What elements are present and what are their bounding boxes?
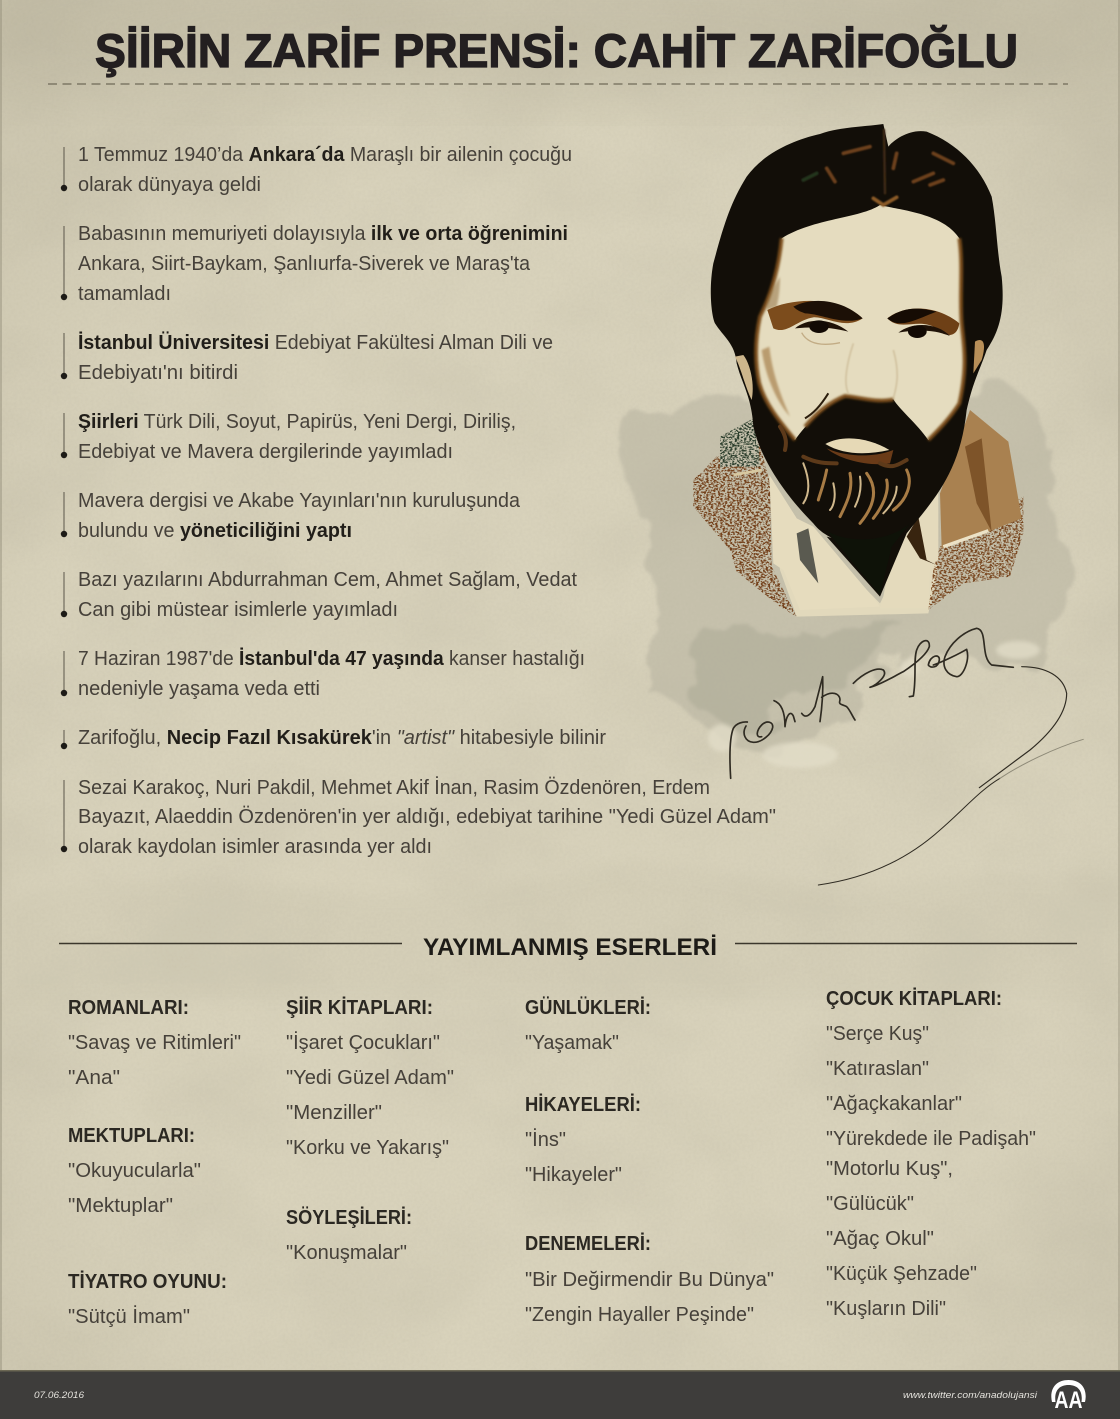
cheek and temple shading — [762, 347, 790, 417]
scratchy jacket texture — [693, 417, 1023, 617]
bio item 3 — [61, 331, 553, 384]
bio item 8: Zarifoğlu, Necip Fazıl Kısakürek'in "artist" hitabesiyle bilinir — [78, 727, 606, 749]
bio item 5: bulundu ve yöneticiliğini yaptı — [78, 520, 352, 542]
column 4: children's books: "Motorlu Kuş", — [826, 1158, 953, 1180]
column 1: novels, letters, play: "Savaş ve Ritimleri" — [68, 1032, 241, 1054]
column 3: diaries, stories, essays: DENEMELERİ: — [525, 1232, 651, 1255]
ear left — [735, 355, 753, 400]
column 2: poetry, interviews: SÖYLEŞİLERİ: — [286, 1206, 412, 1229]
bio item 7 — [61, 647, 585, 700]
column 2: poetry, interviews — [286, 996, 454, 1264]
column 1: novels, letters, play: "Sütçü İmam" — [68, 1305, 190, 1328]
ink wash behind portrait and signature — [620, 380, 1070, 746]
bio item 2: Ankara, Siirt-Baykam, Şanlıurfa-Siverek ve Maraş'ta — [78, 253, 531, 275]
column 4: children's books — [826, 987, 1036, 1320]
bio item 1: olarak dünyaya geldi — [78, 174, 261, 196]
column 4: children's books: "Katıraslan" — [826, 1058, 929, 1080]
bio item 6 — [61, 569, 577, 621]
shirt collars — [769, 475, 880, 610]
column 2: poetry, interviews: "Konuşmalar" — [286, 1242, 407, 1264]
bio item 4 — [61, 411, 516, 463]
column 1: novels, letters, play: "Ana" — [68, 1067, 120, 1089]
bio item 1 — [61, 144, 572, 196]
bio item 7: 7 Haziran 1987'de İstanbul'da 47 yaşında kanser hastalığı — [78, 647, 585, 670]
bio item 3: İstanbul Üniversitesi Edebiyat Fakültesi Alman Dili ve — [78, 331, 553, 354]
hair highlights — [803, 130, 953, 205]
eyebrows and eyes — [767, 301, 959, 344]
column 1: novels, letters, play: MEKTUPLARI: — [68, 1125, 195, 1147]
column 4: children's books: ÇOCUK KİTAPLARI: — [826, 987, 1002, 1010]
column 3: diaries, stories, essays: HİKAYELERİ: — [525, 1093, 641, 1116]
column 3: diaries, stories, essays: "Hikayeler" — [525, 1164, 622, 1186]
icon: AA logo — [1051, 1380, 1086, 1414]
bio item 7: nedeniyle yaşama veda etti — [78, 678, 320, 700]
column 1: novels, letters, play: TİYATRO OYUNU: — [68, 1270, 227, 1293]
bio item 9 — [61, 776, 776, 858]
column 2: poetry, interviews: ŞİİR KİTAPLARI: — [286, 996, 433, 1019]
column 4: children's books: "Ağaçkakanlar" — [826, 1093, 962, 1115]
bio item 2: tamamladı — [78, 283, 171, 305]
column 4: children's books: "Yürekdede ile Padişah" — [826, 1128, 1036, 1150]
column 4: children's books: "Ağaç Okul" — [826, 1228, 934, 1250]
biography timeline — [61, 144, 776, 858]
bio item 9: Bayazıt, Alaeddin Özdenören'in yer aldığı, edebiyat tarihine "Yedi Güzel Adam" — [78, 806, 776, 828]
column 4: children's books: "Kuşların Dili" — [826, 1298, 946, 1320]
column 1: novels, letters, play: ROMANLARI: — [68, 997, 189, 1019]
signature — [730, 628, 1083, 885]
bio item 2 — [61, 223, 568, 305]
bio item 6: Can gibi müstear isimlerle yayımladı — [78, 599, 398, 621]
bio item 5: Mavera dergisi ve Akabe Yayınları'nın kuruluşunda — [78, 490, 521, 512]
date: 07.06.2016 — [34, 1390, 85, 1401]
face — [756, 205, 965, 440]
bio item 4: Şiirleri Türk Dili, Soyut, Papirüs, Yeni Dergi, Diriliş, — [78, 411, 516, 433]
mouth — [825, 438, 889, 453]
dark neck — [827, 523, 910, 595]
jacket right — [940, 410, 1022, 548]
column 3: diaries, stories, essays: GÜNLÜKLERİ: — [525, 996, 651, 1019]
ear right — [973, 340, 984, 373]
column 3: diaries, stories, essays: "Yaşamak" — [525, 1032, 619, 1054]
column 1: novels, letters, play: "Mektuplar" — [68, 1195, 173, 1217]
bio item 4: Edebiyat ve Mavera dergilerinde yayımladı — [78, 441, 453, 463]
section heading: published works: YAYIMLANMIŞ ESERLERİ — [423, 934, 717, 961]
column 3: diaries, stories, essays: "Bir Değirmendir Bu Dünya" — [525, 1269, 774, 1291]
column 1: novels, letters, play — [68, 997, 241, 1328]
bio item 1: 1 Temmuz 1940’da Ankara´da Maraşlı bir ailenin çocuğu — [78, 144, 572, 166]
bio item 3: Edebiyatı'nı bitirdi — [78, 362, 238, 384]
title: ŞİİRİN ZARİF PRENSİ: CAHİT ZARİFOĞLU — [95, 24, 1018, 77]
pale patches in wash — [708, 641, 1040, 768]
column 3: diaries, stories, essays: "İns" — [525, 1128, 566, 1151]
column 1: novels, letters, play: "Okuyucularla" — [68, 1160, 201, 1182]
column 3: diaries, stories, essays: "Zengin Hayaller Peşinde" — [525, 1304, 754, 1326]
footer bar — [0, 1370, 1120, 1419]
column 2: poetry, interviews: "Yedi Güzel Adam" — [286, 1067, 454, 1089]
column 2: poetry, interviews: "İşaret Çocukları" — [286, 1031, 440, 1054]
twitter url: www.twitter.com/anadolujansi — [903, 1390, 1038, 1401]
column 3: diaries, stories, essays — [525, 996, 774, 1326]
pale shirt body fading into paper — [770, 477, 937, 617]
hair and beard silhouette — [711, 124, 1003, 597]
column 4: children's books: "Gülücük" — [826, 1193, 914, 1215]
column 2: poetry, interviews: "Korku ve Yakarış" — [286, 1137, 449, 1159]
bio item 9: olarak kaydolan isimler arasında yer aldı — [78, 836, 432, 858]
beard streaks — [780, 427, 909, 523]
bio item 6: Bazı yazılarını Abdurrahman Cem, Ahmet Sağlam, Vedat — [78, 569, 577, 591]
column 4: children's books: "Küçük Şehzade" — [826, 1263, 977, 1285]
column 2: poetry, interviews: "Menziller" — [286, 1102, 382, 1124]
icon: AA logo: AA — [1054, 1387, 1082, 1414]
bio item 2: Babasının memuriyeti dolayısıyla ilk ve orta öğrenimini — [78, 223, 568, 245]
portrait illustration — [693, 124, 1023, 617]
bio item 5 — [61, 490, 521, 542]
bio item 9: Sezai Karakoç, Nuri Pakdil, Mehmet Akif İnan, Rasim Özdenören, Erdem — [78, 776, 710, 799]
column 4: children's books: "Serçe Kuş" — [826, 1023, 929, 1045]
